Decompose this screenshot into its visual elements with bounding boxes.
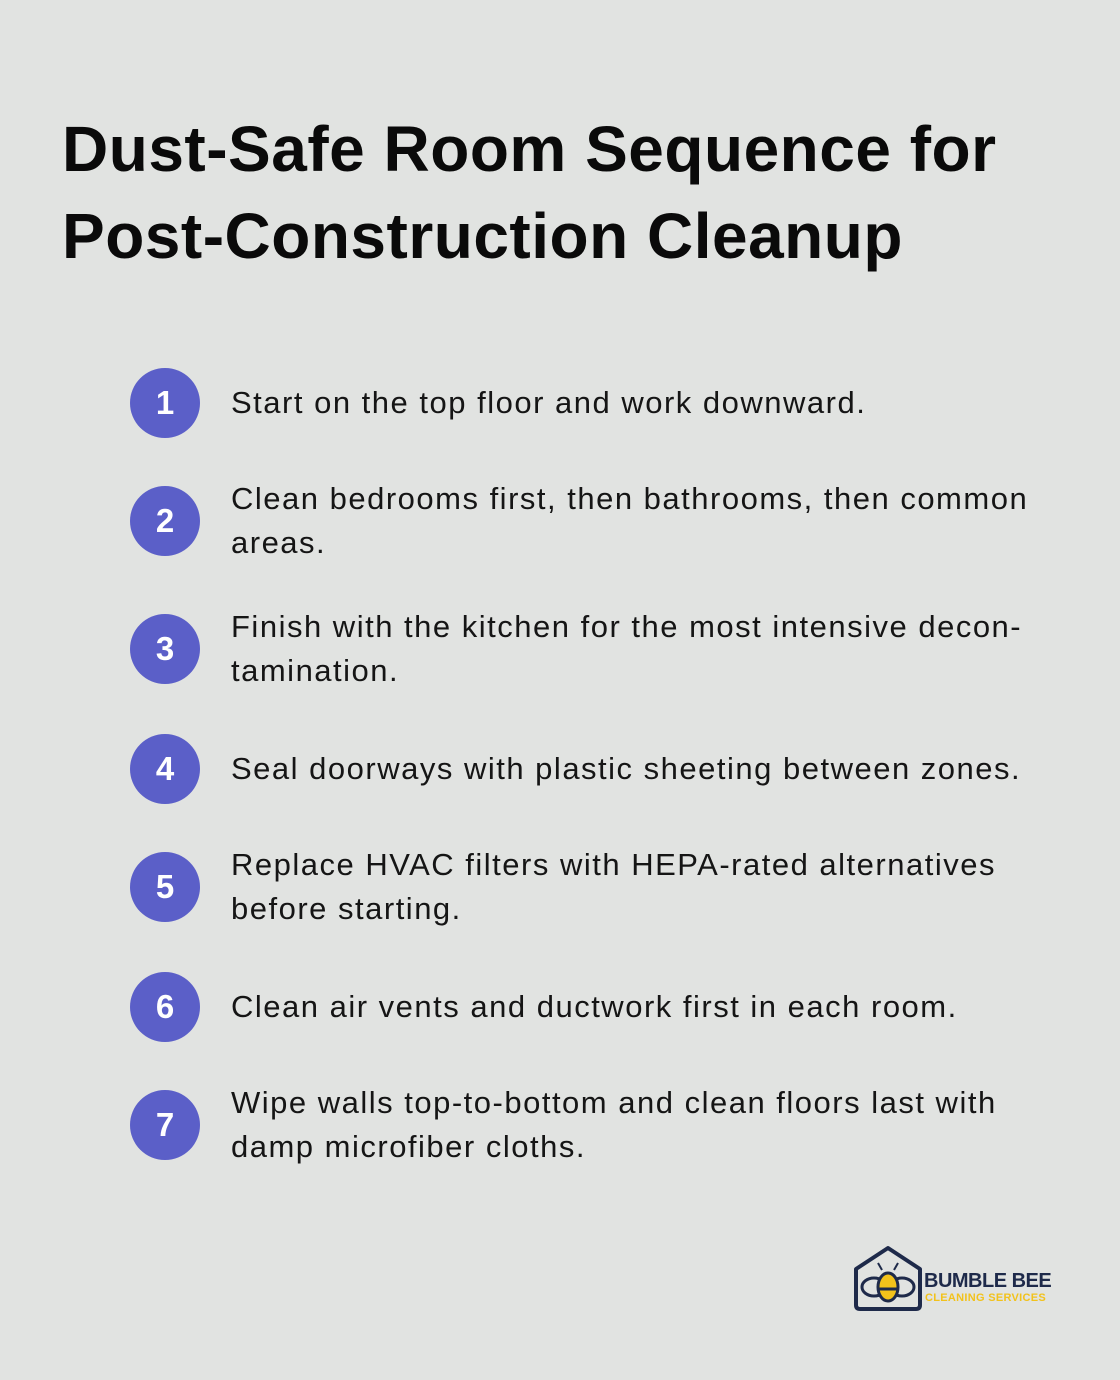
logo: CLEANING SERVICES	[925, 1292, 1046, 1304]
step 7: Wipe walls top-to-bottom and clean floors last with	[231, 1085, 997, 1120]
step 6	[130, 972, 958, 1042]
step 7: 7	[156, 1106, 174, 1143]
step 4: 4	[156, 750, 174, 787]
step 3: 3	[156, 630, 174, 667]
step 1: Start on the top floor and work downward.	[231, 385, 866, 420]
step 2: Clean bedrooms first, then bathrooms, then common	[231, 481, 1028, 516]
step 3: Finish with the kitchen for the most intensive decon-	[231, 609, 1022, 644]
step 2	[130, 481, 1028, 560]
step 4	[130, 734, 1021, 804]
title	[62, 113, 997, 272]
step 5: 5	[156, 868, 174, 905]
step 3	[130, 609, 1022, 688]
step 4: Seal doorways with plastic sheeting between zones.	[231, 751, 1021, 786]
step 2: 2	[156, 502, 174, 539]
step 1	[130, 368, 866, 438]
step 5: Replace HVAC filters with HEPA-rated alternatives	[231, 847, 996, 882]
logo	[854, 1246, 1051, 1311]
icon: bee house	[854, 1246, 922, 1311]
title: Post-Construction Cleanup	[62, 200, 903, 272]
step 1: 1	[156, 384, 174, 421]
step 7: damp microfiber cloths.	[231, 1129, 586, 1164]
step 6: Clean air vents and ductwork first in each room.	[231, 989, 958, 1024]
step 3: tamination.	[231, 653, 399, 688]
logo text: BUMBLE BEE	[924, 1270, 1051, 1292]
step 5	[130, 847, 996, 926]
step 6: 6	[156, 988, 174, 1025]
step 7	[130, 1085, 997, 1164]
title: Dust-Safe Room Sequence for	[62, 113, 997, 185]
step 5: before starting.	[231, 891, 462, 926]
step 2: areas.	[231, 525, 326, 560]
